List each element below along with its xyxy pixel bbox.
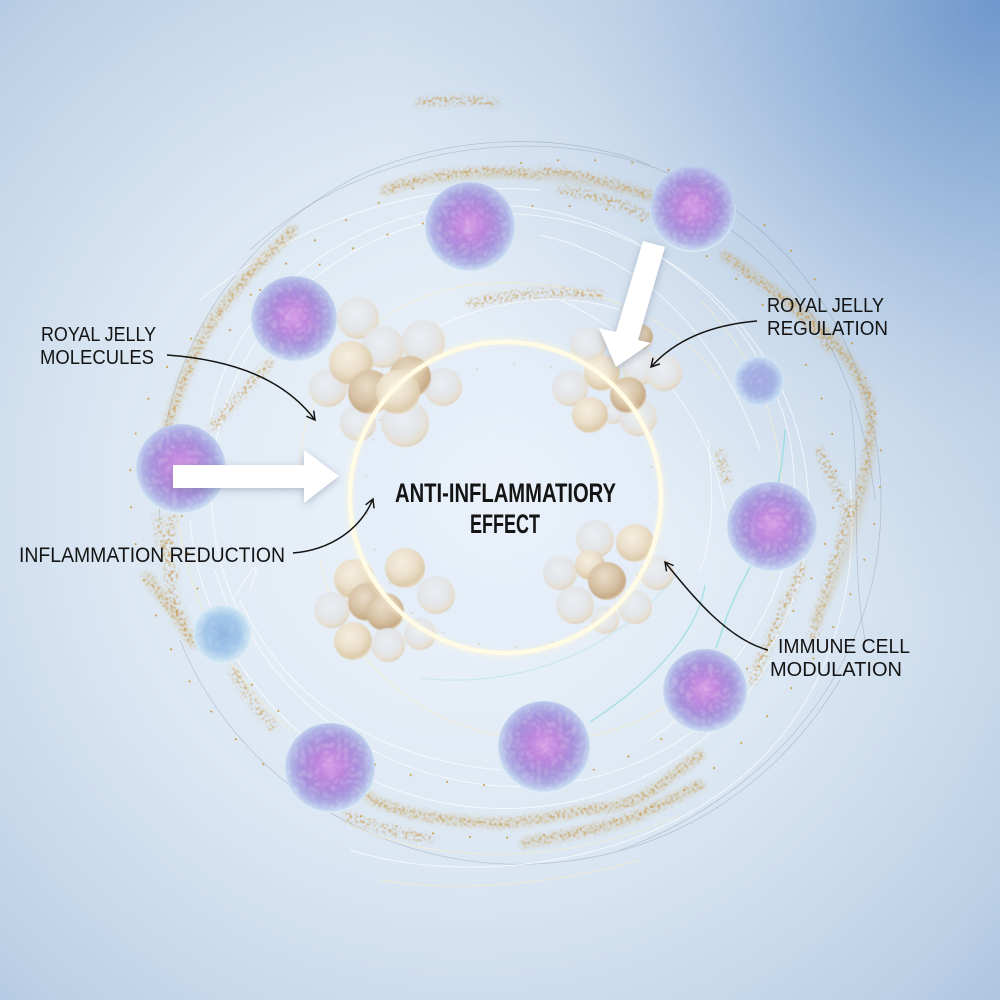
immune cell (top centre) bbox=[425, 182, 515, 272]
leader arrow: royal jelly molecules bbox=[167, 355, 315, 420]
leader arrow: royal jelly regulation bbox=[651, 321, 757, 367]
small light blue cell (lower left) bbox=[193, 605, 251, 663]
central disc bbox=[352, 344, 658, 650]
gold dust swirl bbox=[130, 100, 881, 843]
glowing ring bbox=[350, 342, 662, 654]
label: royal jelly regulation: ROYAL JELLY bbox=[767, 295, 884, 317]
molecule cluster: bottom left bbox=[314, 548, 455, 662]
molecule cluster: top left bbox=[309, 297, 462, 447]
leader arrow: inflammation reduction bbox=[293, 499, 373, 553]
molecule cluster: bottom right bbox=[543, 520, 674, 634]
label: immune cell modulation bbox=[770, 636, 910, 681]
leader arrow: immune cell modulation bbox=[665, 562, 768, 650]
label: royal jelly regulation: REGULATION bbox=[767, 318, 888, 340]
molecule cluster: top right bbox=[552, 324, 682, 436]
title: anti-inflammatory effect bbox=[395, 478, 616, 539]
label: royal jelly molecules bbox=[40, 324, 156, 369]
immune cell (top right) bbox=[650, 166, 736, 252]
immune cell (bottom) bbox=[498, 701, 590, 793]
label: immune cell modulation: IMMUNE CELL bbox=[778, 636, 910, 658]
title: anti-inflammatory effect: ANTI-INFLAMMATIORY bbox=[395, 478, 616, 508]
label: inflammation reduction: INFLAMMATION REDUCTION bbox=[19, 544, 285, 567]
immune cell (lower right) bbox=[663, 649, 747, 733]
label: royal jelly molecules: ROYAL JELLY bbox=[41, 324, 156, 346]
small blue cell (right) bbox=[734, 356, 784, 406]
swirling thread lines bbox=[137, 136, 883, 886]
arrow: left cell to centre bbox=[173, 450, 339, 503]
immune cell (left) bbox=[136, 424, 226, 514]
label: royal jelly molecules: MOLECULES bbox=[40, 347, 154, 369]
label: immune cell modulation: MODULATION bbox=[770, 659, 902, 681]
immune cell (right) bbox=[727, 482, 817, 572]
title: anti-inflammatory effect: EFFECT bbox=[470, 509, 540, 539]
label: royal jelly regulation bbox=[767, 295, 888, 340]
arrow: top right cell to cluster bbox=[599, 241, 665, 367]
immune cell (upper left) bbox=[251, 276, 337, 362]
immune cell (bottom left) bbox=[285, 723, 375, 813]
